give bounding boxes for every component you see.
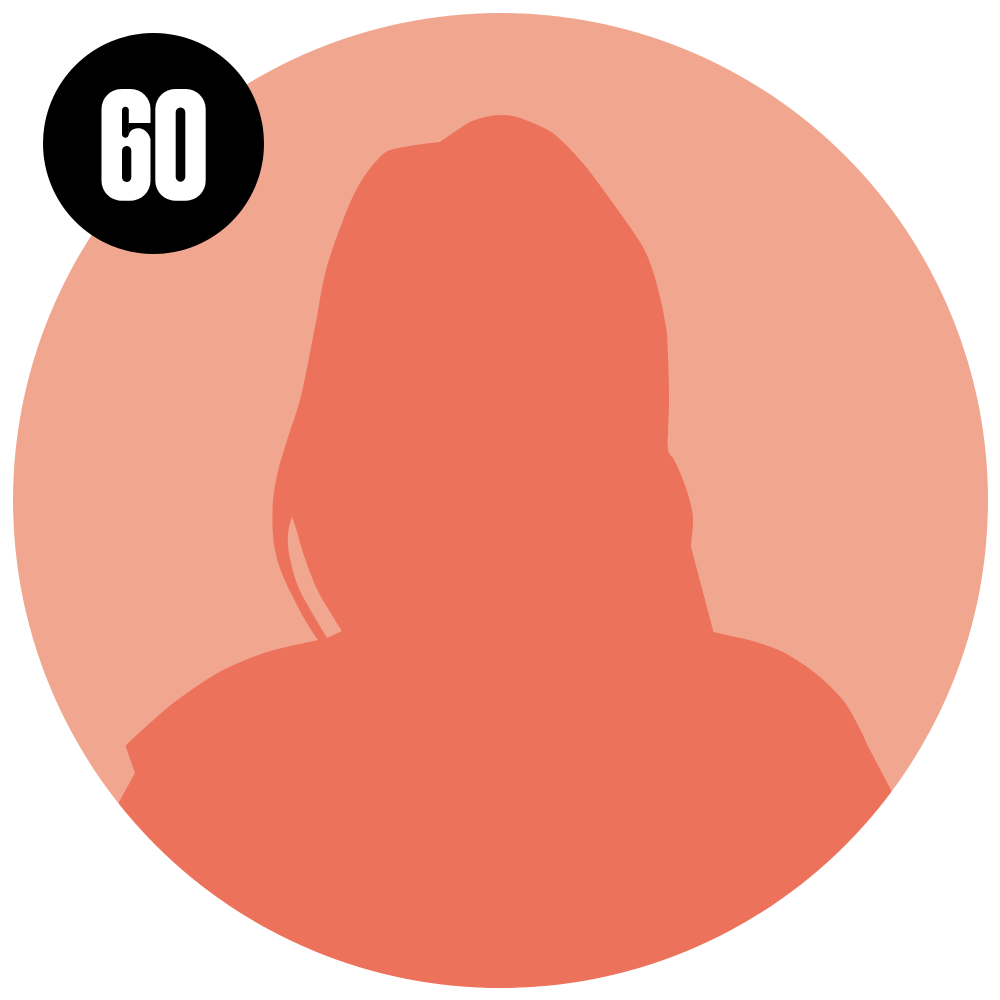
badge number text: 60 — [106, 68, 200, 225]
hair gap highlight — [288, 517, 342, 638]
digit zero block shape — [155, 89, 206, 201]
digit six block shape — [102, 89, 152, 201]
badge: number 60 — [43, 33, 264, 254]
silhouette: person with long hair — [119, 115, 891, 1000]
